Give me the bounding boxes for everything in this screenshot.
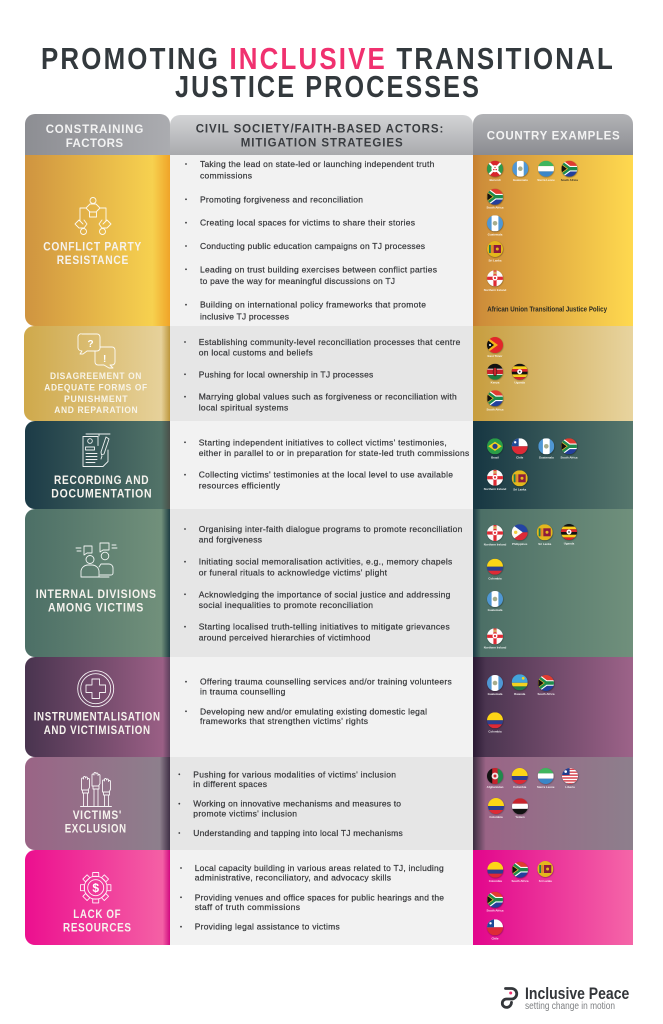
label: instrumentalisation and victimisation <box>34 712 161 737</box>
strategy: community reconciliation <box>184 337 461 358</box>
flag: Sierra Leone: Sierra Leone <box>537 178 555 182</box>
panel: conflict party resistance factor <box>25 155 170 326</box>
strategy: local spaces: Creating local spaces for victims to share their stories <box>200 218 415 228</box>
icon: question and exclamation speech bubbles: ! <box>103 354 106 365</box>
flag: Guatemala <box>512 161 529 182</box>
flag: Colombia: Colombia <box>488 729 502 733</box>
strategy: modalities of inclusion <box>178 769 396 789</box>
flag: Yemen: Yemen <box>515 815 525 819</box>
strategy: venues and office spaces <box>180 892 444 912</box>
flag: Chile <box>512 438 528 460</box>
flag: South Africa <box>486 189 504 210</box>
strategy: venues and office spaces: staff of truth commissions <box>195 902 300 912</box>
flag: Colombia <box>488 798 504 819</box>
strategy: trauma counselling: Offering trauma counselling services and/or training volunteers <box>200 677 452 687</box>
flag: Liberia: Liberia <box>565 785 575 789</box>
strategy: legal frameworks: frameworks that strengthen victims' rights <box>200 716 368 726</box>
strategy: truth commissions: commissions <box>200 171 252 181</box>
strategy: local ownership: Pushing for local ownership in TJ processes <box>199 369 373 379</box>
flag: Northern Ireland: Northern Ireland <box>484 543 506 547</box>
flag: Kenya <box>487 364 504 384</box>
flag: South Africa: South Africa <box>537 692 555 696</box>
column header: civil society mitigation strategies: CIVIL SOCIETY/FAITH-BASED ACTORS: <box>196 124 443 136</box>
flag: Colombia <box>487 712 504 733</box>
flag: South Africa <box>486 892 504 912</box>
panel: strategies for conflict party resistance <box>170 155 473 326</box>
panel: recording and documentation factor <box>25 421 170 509</box>
flag: Colombia: Colombia <box>488 577 502 581</box>
icon: conflict parties meeting <box>75 198 111 234</box>
panel: strategies for instrumentalisation <box>170 657 473 757</box>
logo: Inclusive Peace: Inclusive Peace <box>525 985 629 1003</box>
flag: South Africa <box>486 390 504 412</box>
flag: South Africa: South Africa <box>560 456 578 460</box>
flag: Sri Lanka: Sri Lanka <box>513 488 527 492</box>
label: victims' exclusion: EXCLUSION <box>65 824 127 836</box>
label: instrumentalisation and victimisation: AND VICTIMISATION <box>44 725 151 737</box>
panel: strategies for victims' exclusion <box>170 757 473 850</box>
icon: gear with dollar sign <box>80 872 111 903</box>
title: PROMOTING INCLUSIVE TRANSITIONAL <box>41 41 615 76</box>
flag: Sri Lanka: Sri Lanka <box>539 879 552 883</box>
strategy: independent initiatives <box>184 437 469 458</box>
label: disagreement on adequate forms of punishment and reparation: PUNISHMENT <box>64 394 128 405</box>
strategy: social memorialisation <box>184 557 452 577</box>
strategy: independent initiatives: either in parallel to or in preparation for state-led truth commissions <box>199 448 469 458</box>
flag: Liberia <box>562 768 578 789</box>
column header: constraining factors <box>25 114 170 155</box>
flag: Yemen <box>512 798 528 819</box>
strategy: trust building: Leading on trust building exercises between conflict parties <box>200 264 437 274</box>
logo: Inclusive Peace: setting change in motion <box>525 1001 615 1012</box>
flag: Uganda: Uganda <box>514 380 525 384</box>
label: disagreement on adequate forms of punishment and reparation: ADEQUATE FORMS OF <box>44 383 148 394</box>
column header: civil society mitigation strategies: MITIGATION STRATEGIES <box>241 137 403 149</box>
icon: question and exclamation speech bubbles: ? <box>87 339 94 350</box>
label: victims' exclusion <box>65 810 127 836</box>
icon: document with pen <box>83 434 110 466</box>
strategy: innovative mechanisms <box>178 799 401 818</box>
strategy: innovative mechanisms: Working on innovative mechanisms and measures to <box>193 799 401 809</box>
strategy: social justice <box>184 589 451 610</box>
strategy: collecting testimonies: Collecting victims' testimonies at the local level to use available <box>199 470 453 480</box>
strategy: local TJ mechanisms: Understanding and tapping into local TJ mechanisms <box>193 828 403 838</box>
flag: Colombia: Colombia <box>513 785 527 789</box>
flag: Guatemala: Guatemala <box>488 608 503 612</box>
flag: Guatemala <box>487 591 504 612</box>
icon: logo mark <box>502 988 517 1007</box>
flag: Sri Lanka <box>537 524 553 546</box>
strategy: social justice: Acknowledging the importance of social justice and addressing <box>199 589 451 599</box>
panel: instrumentalisation and victimisation factor <box>25 657 170 757</box>
strategy: policy frameworks <box>185 300 426 321</box>
flag: Brazil <box>487 438 504 460</box>
flag: Sierra Leone: Sierra Leone <box>537 785 555 789</box>
strategy: trauma counselling <box>185 677 452 697</box>
strategy: forgiveness: Promoting forgiveness and reconciliation <box>200 194 363 204</box>
icon: three raised hands <box>80 772 112 806</box>
flag: South Africa: South Africa <box>486 908 504 912</box>
column header: constraining factors: CONSTRAINING <box>46 124 143 136</box>
strategy: community reconciliation: on local customs and beliefs <box>199 348 313 358</box>
flag: South Africa: South Africa <box>561 178 578 182</box>
panel: country examples for victims' exclusion <box>473 757 633 850</box>
strategy: truth-telling: around perceived hierarchies of victimhood <box>199 632 371 642</box>
label: recording and documentation: RECORDING AND <box>54 475 149 487</box>
label: conflict party resistance: RESISTANCE <box>57 255 129 267</box>
strategy: capacity building <box>180 863 444 883</box>
strategy: truth-telling <box>184 622 450 642</box>
flag: Chile <box>487 919 504 941</box>
flag: Uganda <box>512 364 528 384</box>
icon: two people with speech bubbles <box>76 543 117 577</box>
flag: Brazil: Brazil <box>491 456 499 460</box>
strategy: inter-faith dialogue: Organising inter-faith dialogue programs to promote reconciliation <box>199 524 463 534</box>
flag: Northern Ireland <box>484 525 506 547</box>
strategy: legal frameworks: Developing new and/or emulating existing domestic legal <box>200 706 427 716</box>
label: lack of resources: RESOURCES <box>63 923 132 935</box>
label: victims' exclusion: VICTIMS' <box>73 810 122 822</box>
label: recording and documentation <box>51 475 152 501</box>
icon: gear with dollar sign: $ <box>92 881 99 895</box>
strategy: trauma counselling: in trauma counselling <box>200 687 286 697</box>
label: disagreement on adequate forms of punishment and reparation: DISAGREEMENT ON <box>50 371 142 382</box>
strategy: social memorialisation: Initiating social memoralisation activities, e.g., memory chapels <box>199 557 452 567</box>
flag: Colombia <box>487 862 504 883</box>
strategy: social justice: social inequalities to promote reconciliation <box>199 600 373 610</box>
strategy: truth-telling: Starting localised truth-telling initiatives to mitigate grievances <box>199 622 450 632</box>
panel: lack of resources factor <box>25 850 170 945</box>
strategy: modalities of inclusion: in different spaces <box>193 779 267 789</box>
strategy: collecting testimonies <box>184 470 453 491</box>
flag: Burundi: Burundi <box>489 178 501 182</box>
panel: strategies for lack of resources <box>170 850 473 945</box>
panel: disagreement factor <box>24 326 170 421</box>
flag: South Africa: South Africa <box>486 206 504 210</box>
strategy: legal frameworks <box>185 706 427 726</box>
column header: country examples: COUNTRY EXAMPLES <box>487 131 620 143</box>
label: disagreement on adequate forms of punishment and reparation <box>44 371 148 416</box>
label: internal divisions among victims: AMONG VICTIMS <box>48 603 144 615</box>
label: conflict party resistance <box>43 242 142 267</box>
flag: Northern Ireland: Northern Ireland <box>484 487 506 491</box>
panel: country examples for lack of resources <box>473 850 633 945</box>
text: African Union policy: African Union Transitional Justice Policy <box>487 304 607 314</box>
flag: Chile: Chile <box>516 456 524 460</box>
panel: strategies for recording and documentation <box>170 421 473 509</box>
strategy: truth commissions <box>185 159 435 181</box>
flag: Philippines: Philippines <box>512 542 528 546</box>
strategy: public education: Conducting public education campaigns on TJ processes <box>200 241 425 251</box>
label: internal divisions among victims <box>36 589 157 615</box>
flag: Afghanistan <box>487 768 504 789</box>
flag: Sri Lanka <box>512 470 528 492</box>
flag: Sri Lanka: Sri Lanka <box>488 259 502 263</box>
strategy: capacity building: administrative, reconciliatory, and advocacy skills <box>195 873 391 883</box>
panel: country examples for instrumentalisation <box>473 657 633 757</box>
flag: Colombia <box>512 768 528 789</box>
strategy: inter-faith dialogue <box>184 524 463 545</box>
panel: victims' exclusion factor <box>25 757 170 850</box>
flag: Uganda: Uganda <box>564 542 575 546</box>
flag: South Africa <box>537 675 555 696</box>
flag: Burundi <box>487 161 504 182</box>
panel: country examples for conflict party resistance <box>473 155 633 326</box>
strategy: modalities of inclusion: Pushing for various modalities of victims' inclusion <box>193 769 396 779</box>
label: recording and documentation: DOCUMENTATION <box>51 489 152 501</box>
flag: Rwanda <box>512 674 528 696</box>
flag: Northern Ireland <box>484 270 506 292</box>
flag: Sierra Leone <box>537 161 555 182</box>
panel: country examples for recording and documentation <box>473 421 633 509</box>
strategy: independent initiatives: Starting independent initiatives to collect victims' testimonies, <box>199 437 447 447</box>
logo: Inclusive Peace <box>502 985 629 1012</box>
flag: Guatemala <box>487 675 504 696</box>
flag: Sri Lanka <box>537 861 554 883</box>
flag: Northern Ireland <box>484 470 506 491</box>
flag: Northern Ireland: Northern Ireland <box>484 288 506 292</box>
strategy: trust building: to pave the way for meaningful discussions on TJ <box>200 276 395 286</box>
strategy: legal assistance: Providing legal assistance to victims <box>195 922 340 932</box>
strategy: innovative mechanisms: promote victims' inclusion <box>193 808 297 818</box>
panel: strategies for internal divisions <box>170 509 473 657</box>
flag: South Africa: South Africa <box>486 408 504 412</box>
flag: Guatemala <box>487 215 504 237</box>
flag: South Africa: South Africa <box>511 879 529 883</box>
column header: civil society mitigation strategies <box>170 115 473 155</box>
flag: Rwanda: Rwanda <box>514 692 526 696</box>
flag: Guatemala: Guatemala <box>539 456 554 460</box>
flag: Guatemala: Guatemala <box>488 692 503 696</box>
flag: Philippines <box>512 524 528 546</box>
flag: Chile: Chile <box>491 937 499 941</box>
title <box>41 41 615 104</box>
flag: South Africa <box>511 862 529 883</box>
label: conflict party resistance: CONFLICT PARTY <box>43 242 142 254</box>
flag: Colombia: Colombia <box>489 815 503 819</box>
flag: South Africa <box>561 161 578 182</box>
strategy: global values: local spiritual systems <box>199 402 288 412</box>
flag: East Timor <box>487 337 504 358</box>
panel: internal divisions among victims factor <box>25 509 170 657</box>
strategy: truth commissions: Taking the lead on state-led or launching independent truth <box>200 159 435 169</box>
strategy: community reconciliation: Establishing community-level reconciliation processes that centre <box>199 337 461 347</box>
icon: question and exclamation speech bubbles <box>78 334 115 368</box>
strategy: global values <box>184 392 457 412</box>
panel: country examples for internal divisions <box>473 509 633 657</box>
title: JUSTICE PROCESSES <box>175 69 481 104</box>
strategy: social memorialisation: or funeral rituals to acknowledge victims' plight <box>199 567 388 577</box>
flag: Kenya: Kenya <box>491 380 500 384</box>
label: lack of resources: LACK OF <box>73 909 121 921</box>
flag: Guatemala: Guatemala <box>488 233 503 237</box>
flag: Sri Lanka <box>487 241 504 263</box>
icon: medical cross in circle <box>78 671 114 707</box>
panel: country examples for disagreement <box>473 326 633 421</box>
column header: country examples <box>473 114 633 155</box>
flag: Guatemala <box>538 438 555 460</box>
strategy: policy frameworks: Building on international policy frameworks that promote <box>200 300 426 310</box>
strategy: capacity building: Local capacity building in various areas related to TJ, including <box>195 863 444 873</box>
strategy: policy frameworks: inclusive TJ processes <box>200 311 289 321</box>
strategy: global values: Marrying global values such as forgiveness or reconciliation with <box>199 392 457 402</box>
flag: Northern Ireland: Northern Ireland <box>484 646 506 650</box>
strategy: trust building <box>185 264 437 286</box>
column header: constraining factors: FACTORS <box>66 138 123 150</box>
label: disagreement on adequate forms of punishment and reparation: AND REPARATION <box>54 405 138 416</box>
panel: strategies for disagreement <box>170 326 473 421</box>
flag: South Africa <box>560 438 578 460</box>
flag: East Timor: East Timor <box>488 354 503 358</box>
label: instrumentalisation and victimisation: INSTRUMENTALISATION <box>34 712 161 724</box>
flag: Colombia: Colombia <box>489 879 502 883</box>
strategy: venues and office spaces: Providing venues and office spaces for public hearings and the <box>195 892 444 902</box>
flag: Uganda <box>561 524 578 546</box>
flag: Afghanistan: Afghanistan <box>487 785 504 789</box>
label: internal divisions among victims: INTERNAL DIVISIONS <box>36 589 157 601</box>
flag: Sri Lanka: Sri Lanka <box>538 542 552 546</box>
flag: Colombia <box>487 559 504 581</box>
label: lack of resources <box>63 909 132 935</box>
flag: Northern Ireland <box>484 628 506 650</box>
flag: Guatemala: Guatemala <box>513 178 528 182</box>
strategy: collecting testimonies: resources efficiently <box>199 481 281 491</box>
strategy: inter-faith dialogue: and forgiveness <box>199 535 262 545</box>
flag: Sierra Leone <box>537 768 555 789</box>
